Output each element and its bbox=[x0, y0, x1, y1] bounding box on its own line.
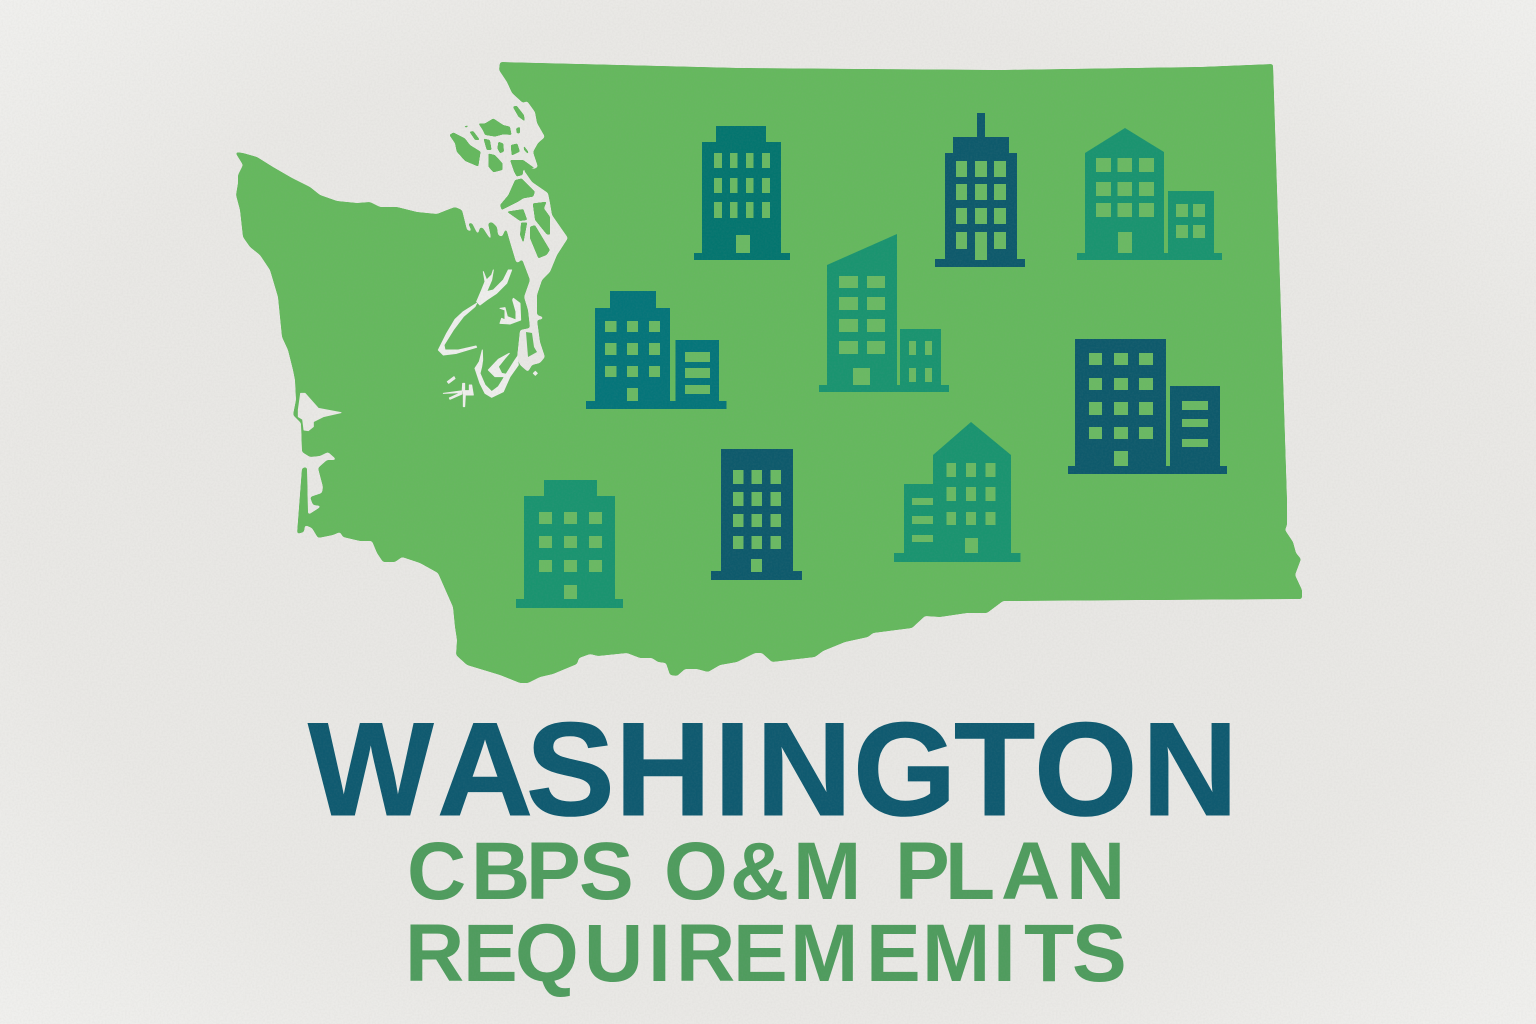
building 3: green gabled block with annex bbox=[1077, 128, 1222, 260]
building 8: navy tower, bottom-centre bbox=[711, 449, 802, 580]
title: WASHINGTON: WASHINGTON bbox=[308, 696, 1238, 844]
state outline bbox=[235, 62, 1302, 683]
building 9: green gabled tower with annex, bottom-right bbox=[894, 422, 1020, 562]
subtitle line 2: REQUIREMEMITS bbox=[405, 908, 1127, 999]
building 6: large navy block with annex, right bbox=[1068, 339, 1227, 474]
building 5: teal block with annex, centre-left bbox=[586, 291, 726, 409]
map: Washington state silhouette bbox=[235, 62, 1302, 683]
water: Hood Canal and south Puget Sound inlets bbox=[438, 270, 537, 407]
building 1: teal tower, top centre-left bbox=[694, 126, 790, 260]
islands: San Juan Islands, Whidbey, Camano and others bbox=[449, 106, 550, 258]
subtitle line 1: CBPS O&M PLAN bbox=[407, 826, 1125, 917]
water: Grays Harbor bbox=[298, 393, 341, 431]
building 4: green slanted-roof tower with annex bbox=[819, 234, 949, 392]
island: Vashon bbox=[526, 332, 537, 357]
building 7: green tower, bottom-left bbox=[516, 480, 623, 608]
building 2: navy tower with antenna bbox=[935, 113, 1025, 267]
